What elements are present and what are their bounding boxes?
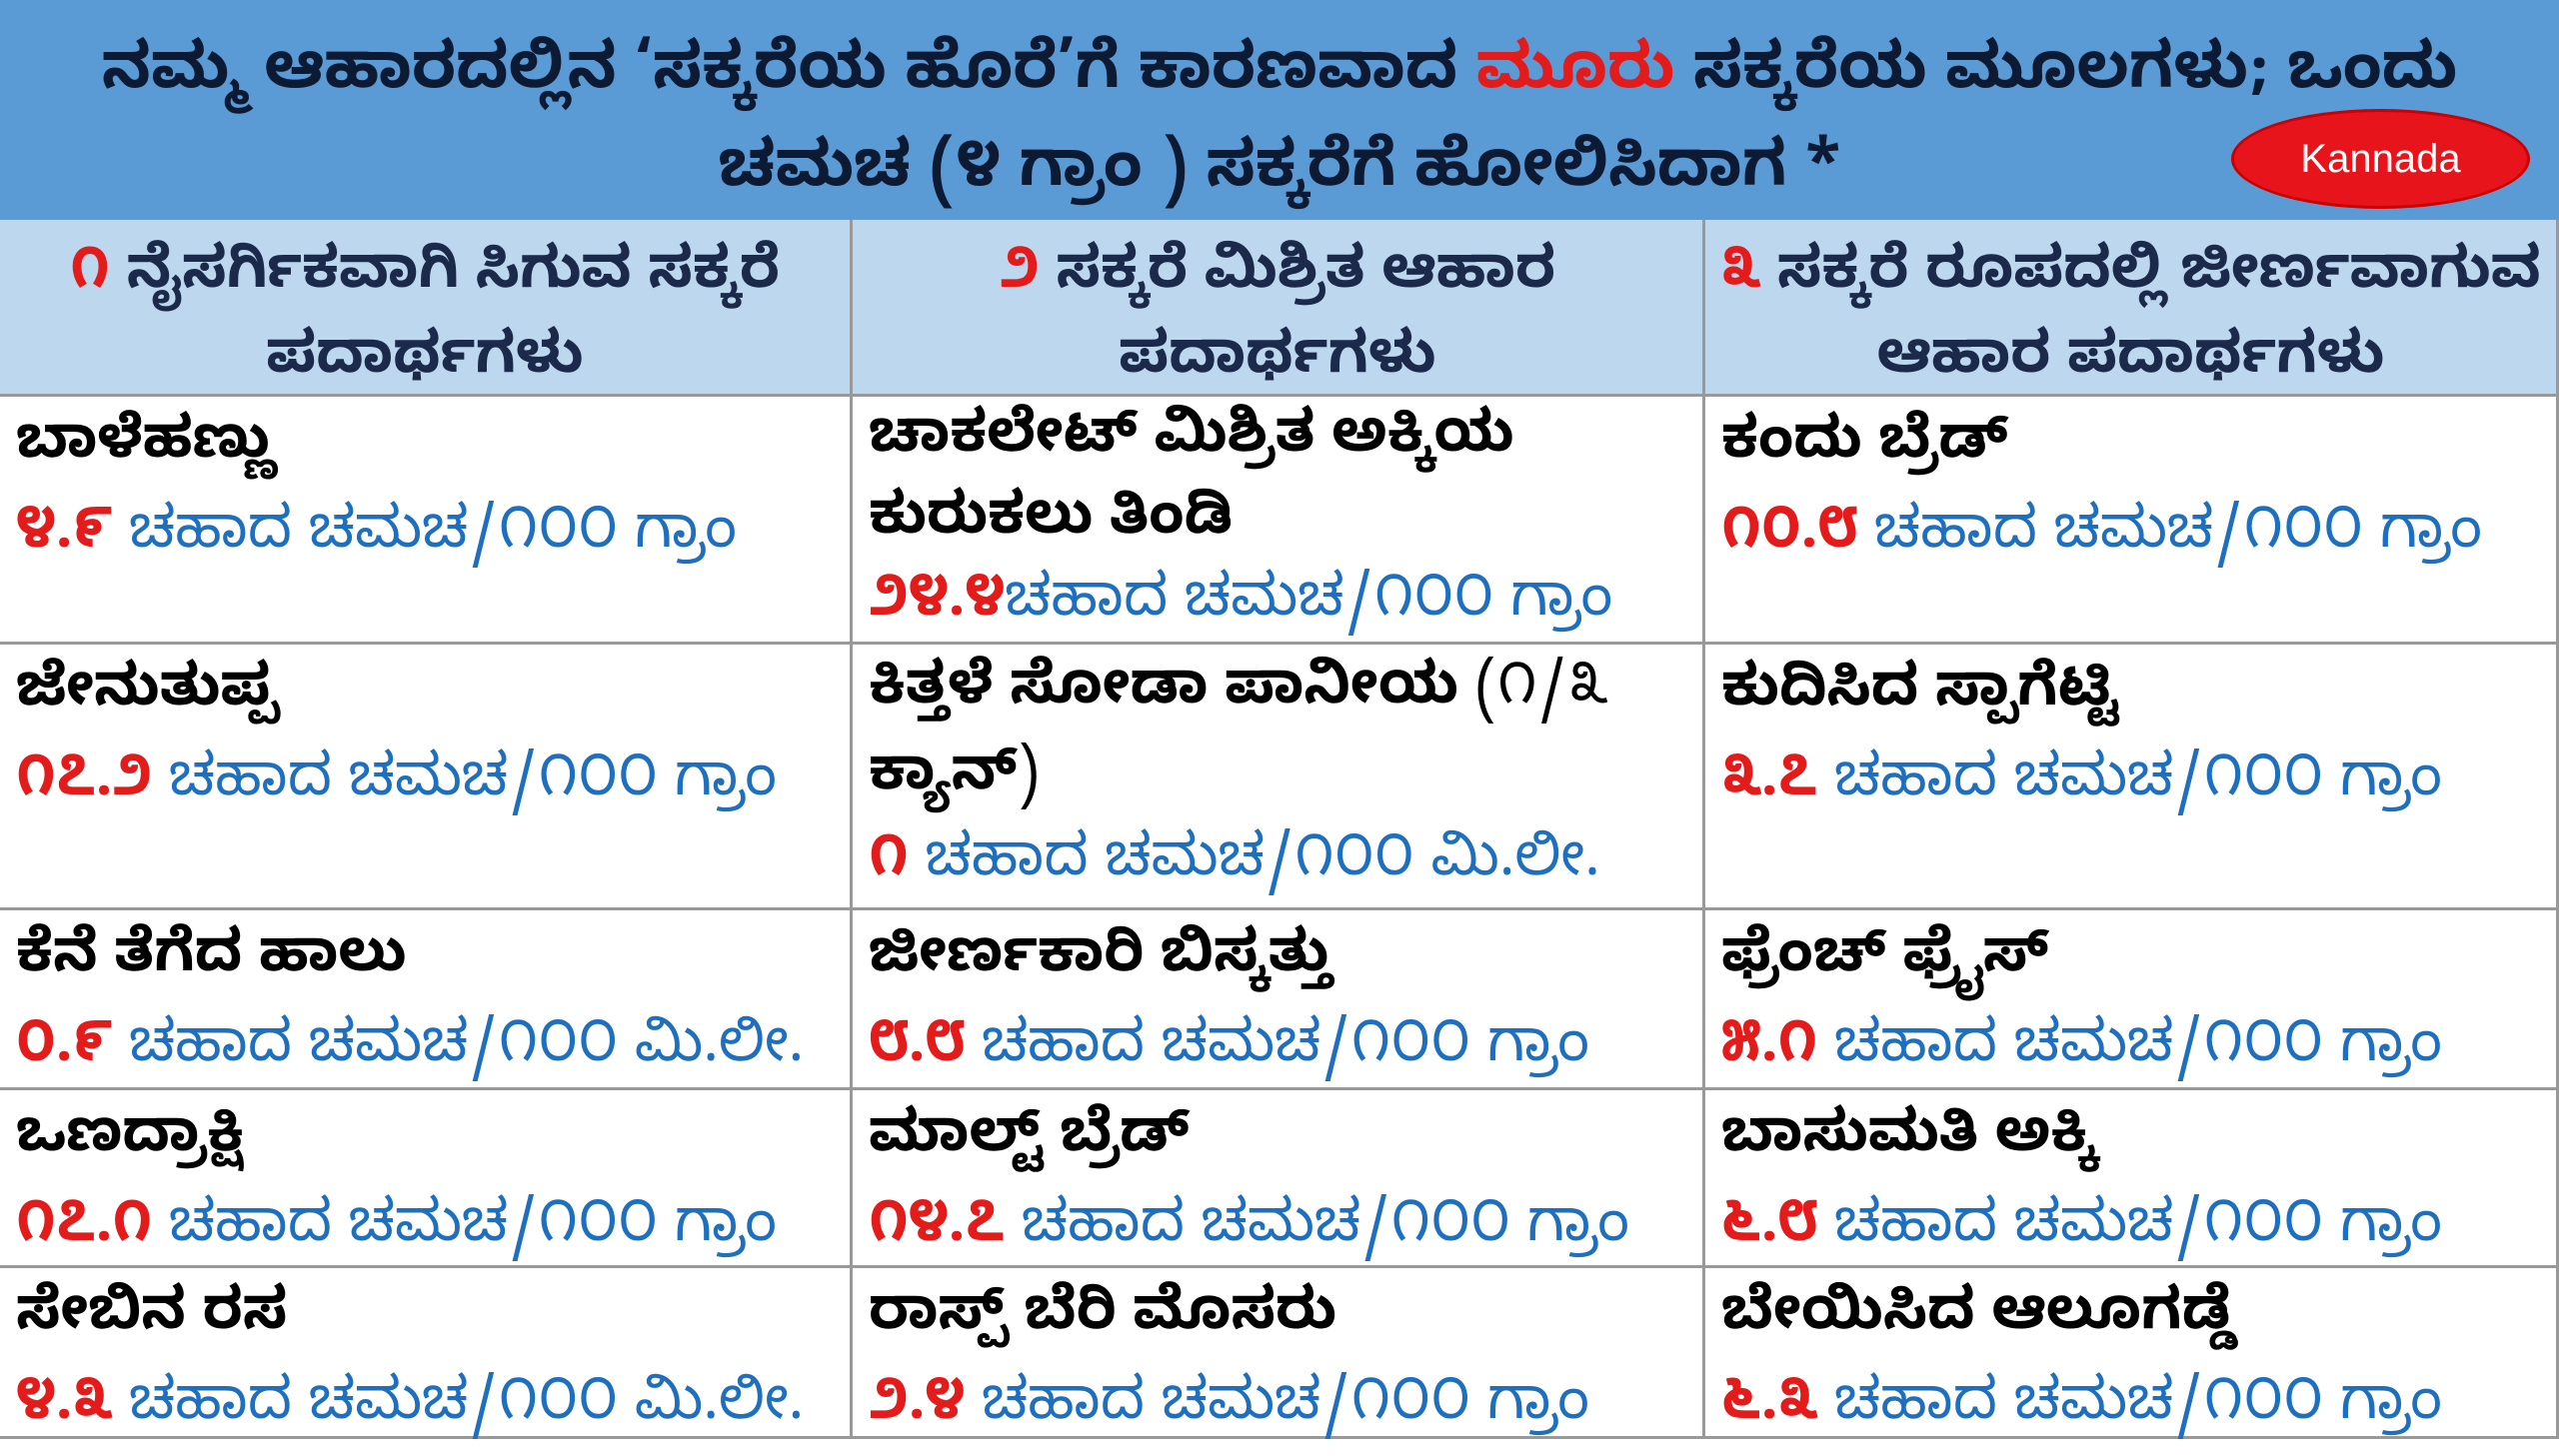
language badge: [2231, 109, 2530, 209]
row 4 col 3: [1705, 1090, 2559, 1268]
row 1 col 2: ಚಾಕಲೇಟ್ ಮಿಶ್ರಿತ ಅಕ್ಕಿಯ: [869, 405, 1514, 483]
row 2 col 3: ೩.೭ ಚಹಾದ ಚಮಚ/೧೦೦ ಗ್ರಾಂ: [1721, 748, 2442, 826]
row 4 col 2: ಮಾಲ್ಟ್ ಬ್ರೆಡ್: [869, 1104, 1190, 1182]
row 5 col 2: [853, 1268, 1705, 1439]
header: column 1: ಪದಾರ್ಥಗಳು: [266, 326, 584, 404]
title: ನಮ್ಮ ಆಹಾರದಲ್ಲಿನ ‘ಸಕ್ಕರೆಯ ಹೊರೆ’ಗೆ ಕಾರಣವಾದ ಮೂರು ಸಕ್ಕರೆಯ ಮೂಲಗಳು; ಒಂದು: [102, 35, 2457, 122]
row 4 col 2: [853, 1090, 1705, 1268]
row 2 col 2: ಕಿತ್ತಳೆ ಸೋಡಾ ಪಾನೀಯ (೧/೩: [869, 657, 1607, 734]
row 1 col 3: [1705, 397, 2559, 645]
row 3 col 2: ೮.೮ ಚಹಾದ ಚಮಚ/೧೦೦ ಗ್ರಾಂ: [869, 1014, 1589, 1092]
row 2 col 2: ಕ್ಯಾನ್): [869, 742, 1040, 820]
row 3 col 3: [1705, 910, 2559, 1090]
row 1 col 1: ೪.೯ ಚಹಾದ ಚಮಚ/೧೦೦ ಗ್ರಾಂ: [16, 501, 737, 579]
header: column 3: ೩ ಸಕ್ಕರೆ ರೂಪದಲ್ಲಿ ಜೀರ್ಣವಾಗುವ: [1720, 241, 2541, 319]
row 4 col 1: ೧೭.೧ ಚಹಾದ ಚಮಚ/೧೦೦ ಗ್ರಾಂ: [16, 1194, 777, 1272]
row 1 col 2: ೨೪.೪ಚಹಾದ ಚಮಚ/೧೦೦ ಗ್ರಾಂ: [869, 569, 1612, 647]
row 2 col 1: ೧೭.೨ ಚಹಾದ ಚಮಚ/೧೦೦ ಗ್ರಾಂ: [16, 748, 777, 826]
row 3 col 2: ಜೀರ್ಣಕಾರಿ ಬಿಸ್ಕತ್ತು: [869, 924, 1331, 1002]
row 3 col 1: [0, 910, 853, 1090]
title: ಚಮಚ (೪ ಗ್ರಾಂ ) ಸಕ್ಕರೆಗೆ ಹೋಲಿಸಿದಾಗ *: [719, 133, 1840, 220]
row 5 col 2: ರಾಸ್ಪ್ ಬೆರಿ ಮೊಸರು: [869, 1282, 1336, 1360]
row 5 col 3: [1705, 1268, 2559, 1439]
header: column 1: [0, 220, 853, 397]
row 4 col 3: ೬.೮ ಚಹಾದ ಚಮಚ/೧೦೦ ಗ್ರಾಂ: [1721, 1194, 2442, 1272]
row 3 col 3: ೫.೧ ಚಹಾದ ಚಮಚ/೧೦೦ ಗ್ರಾಂ: [1721, 1014, 2442, 1092]
header: column 1: ೧ ನೈಸರ್ಗಿಕವಾಗಿ ಸಿಗುವ ಸಕ್ಕರೆ: [70, 241, 780, 319]
language badge: Kannada: [2300, 137, 2461, 181]
row 3 col 1: ಕೆನೆ ತೆಗೆದ ಹಾಲು: [16, 924, 407, 1002]
row 5 col 1: [0, 1268, 853, 1439]
row 4 col 2: ೧೪.೭ ಚಹಾದ ಚಮಚ/೧೦೦ ಗ್ರಾಂ: [869, 1194, 1629, 1272]
row 4 col 3: ಬಾಸುಮತಿ ಅಕ್ಕಿ: [1721, 1104, 2097, 1182]
row 1 col 3: ಕಂದು ಬ್ರೆಡ್: [1721, 411, 2008, 489]
header: column 2: ಪದಾರ್ಥಗಳು: [1119, 326, 1436, 404]
row 3 col 1: ೦.೯ ಚಹಾದ ಚಮಚ/೧೦೦ ಮಿ.ಲೀ.: [16, 1014, 804, 1092]
row 1 col 1: [0, 397, 853, 645]
row 2 col 3: ಕುದಿಸಿದ ಸ್ಪಾಗೆಟ್ಟಿ: [1721, 659, 2119, 736]
header: column 2: ೨ ಸಕ್ಕರೆ ಮಿಶ್ರಿತ ಆಹಾರ: [1000, 241, 1555, 319]
row 5 col 1: ೪.೩ ಚಹಾದ ಚಮಚ/೧೦೦ ಮಿ.ಲೀ.: [16, 1372, 804, 1450]
row 4 col 1: [0, 1090, 853, 1268]
title: [0, 0, 2559, 220]
row 5 col 3: ಬೇಯಿಸಿದ ಆಲೂಗಡ್ಡೆ: [1721, 1282, 2234, 1360]
row 3 col 3: ಫ್ರೆಂಚ್ ಫ್ರೈಸ್: [1721, 924, 2049, 1002]
row 1 col 1: ಬಾಳೆಹಣ್ಣು: [16, 411, 275, 489]
row 4 col 1: ಒಣದ್ರಾಕ್ಷಿ: [16, 1104, 244, 1182]
row 2 col 1: ಜೇನುತುಪ್ಪ: [16, 659, 279, 736]
header: column 3: [1705, 220, 2559, 397]
row 3 col 2: [853, 910, 1705, 1090]
row 1 col 2: ಕುರುಕಲು ತಿಂಡಿ: [869, 487, 1233, 565]
header: column 3: ಆಹಾರ ಪದಾರ್ಥಗಳು: [1877, 326, 2384, 404]
row 5 col 2: ೨.೪ ಚಹಾದ ಚಮಚ/೧೦೦ ಗ್ರಾಂ: [869, 1372, 1589, 1450]
row 2 col 2: ೧ ಚಹಾದ ಚಮಚ/೧೦೦ ಮಿ.ಲೀ.: [869, 828, 1600, 906]
row 1 col 3: ೧೦.೮ ಚಹಾದ ಚಮಚ/೧೦೦ ಗ್ರಾಂ: [1721, 501, 2482, 579]
row 5 col 3: ೬.೩ ಚಹಾದ ಚಮಚ/೧೦೦ ಗ್ರಾಂ: [1721, 1372, 2442, 1450]
row 2 col 2: [853, 645, 1705, 910]
row 2 col 3: [1705, 645, 2559, 910]
row 2 col 1: [0, 645, 853, 910]
row 1 col 2: [853, 397, 1705, 645]
row 5 col 1: ಸೇಬಿನ ರಸ: [16, 1282, 287, 1360]
header: column 2: [853, 220, 1705, 397]
